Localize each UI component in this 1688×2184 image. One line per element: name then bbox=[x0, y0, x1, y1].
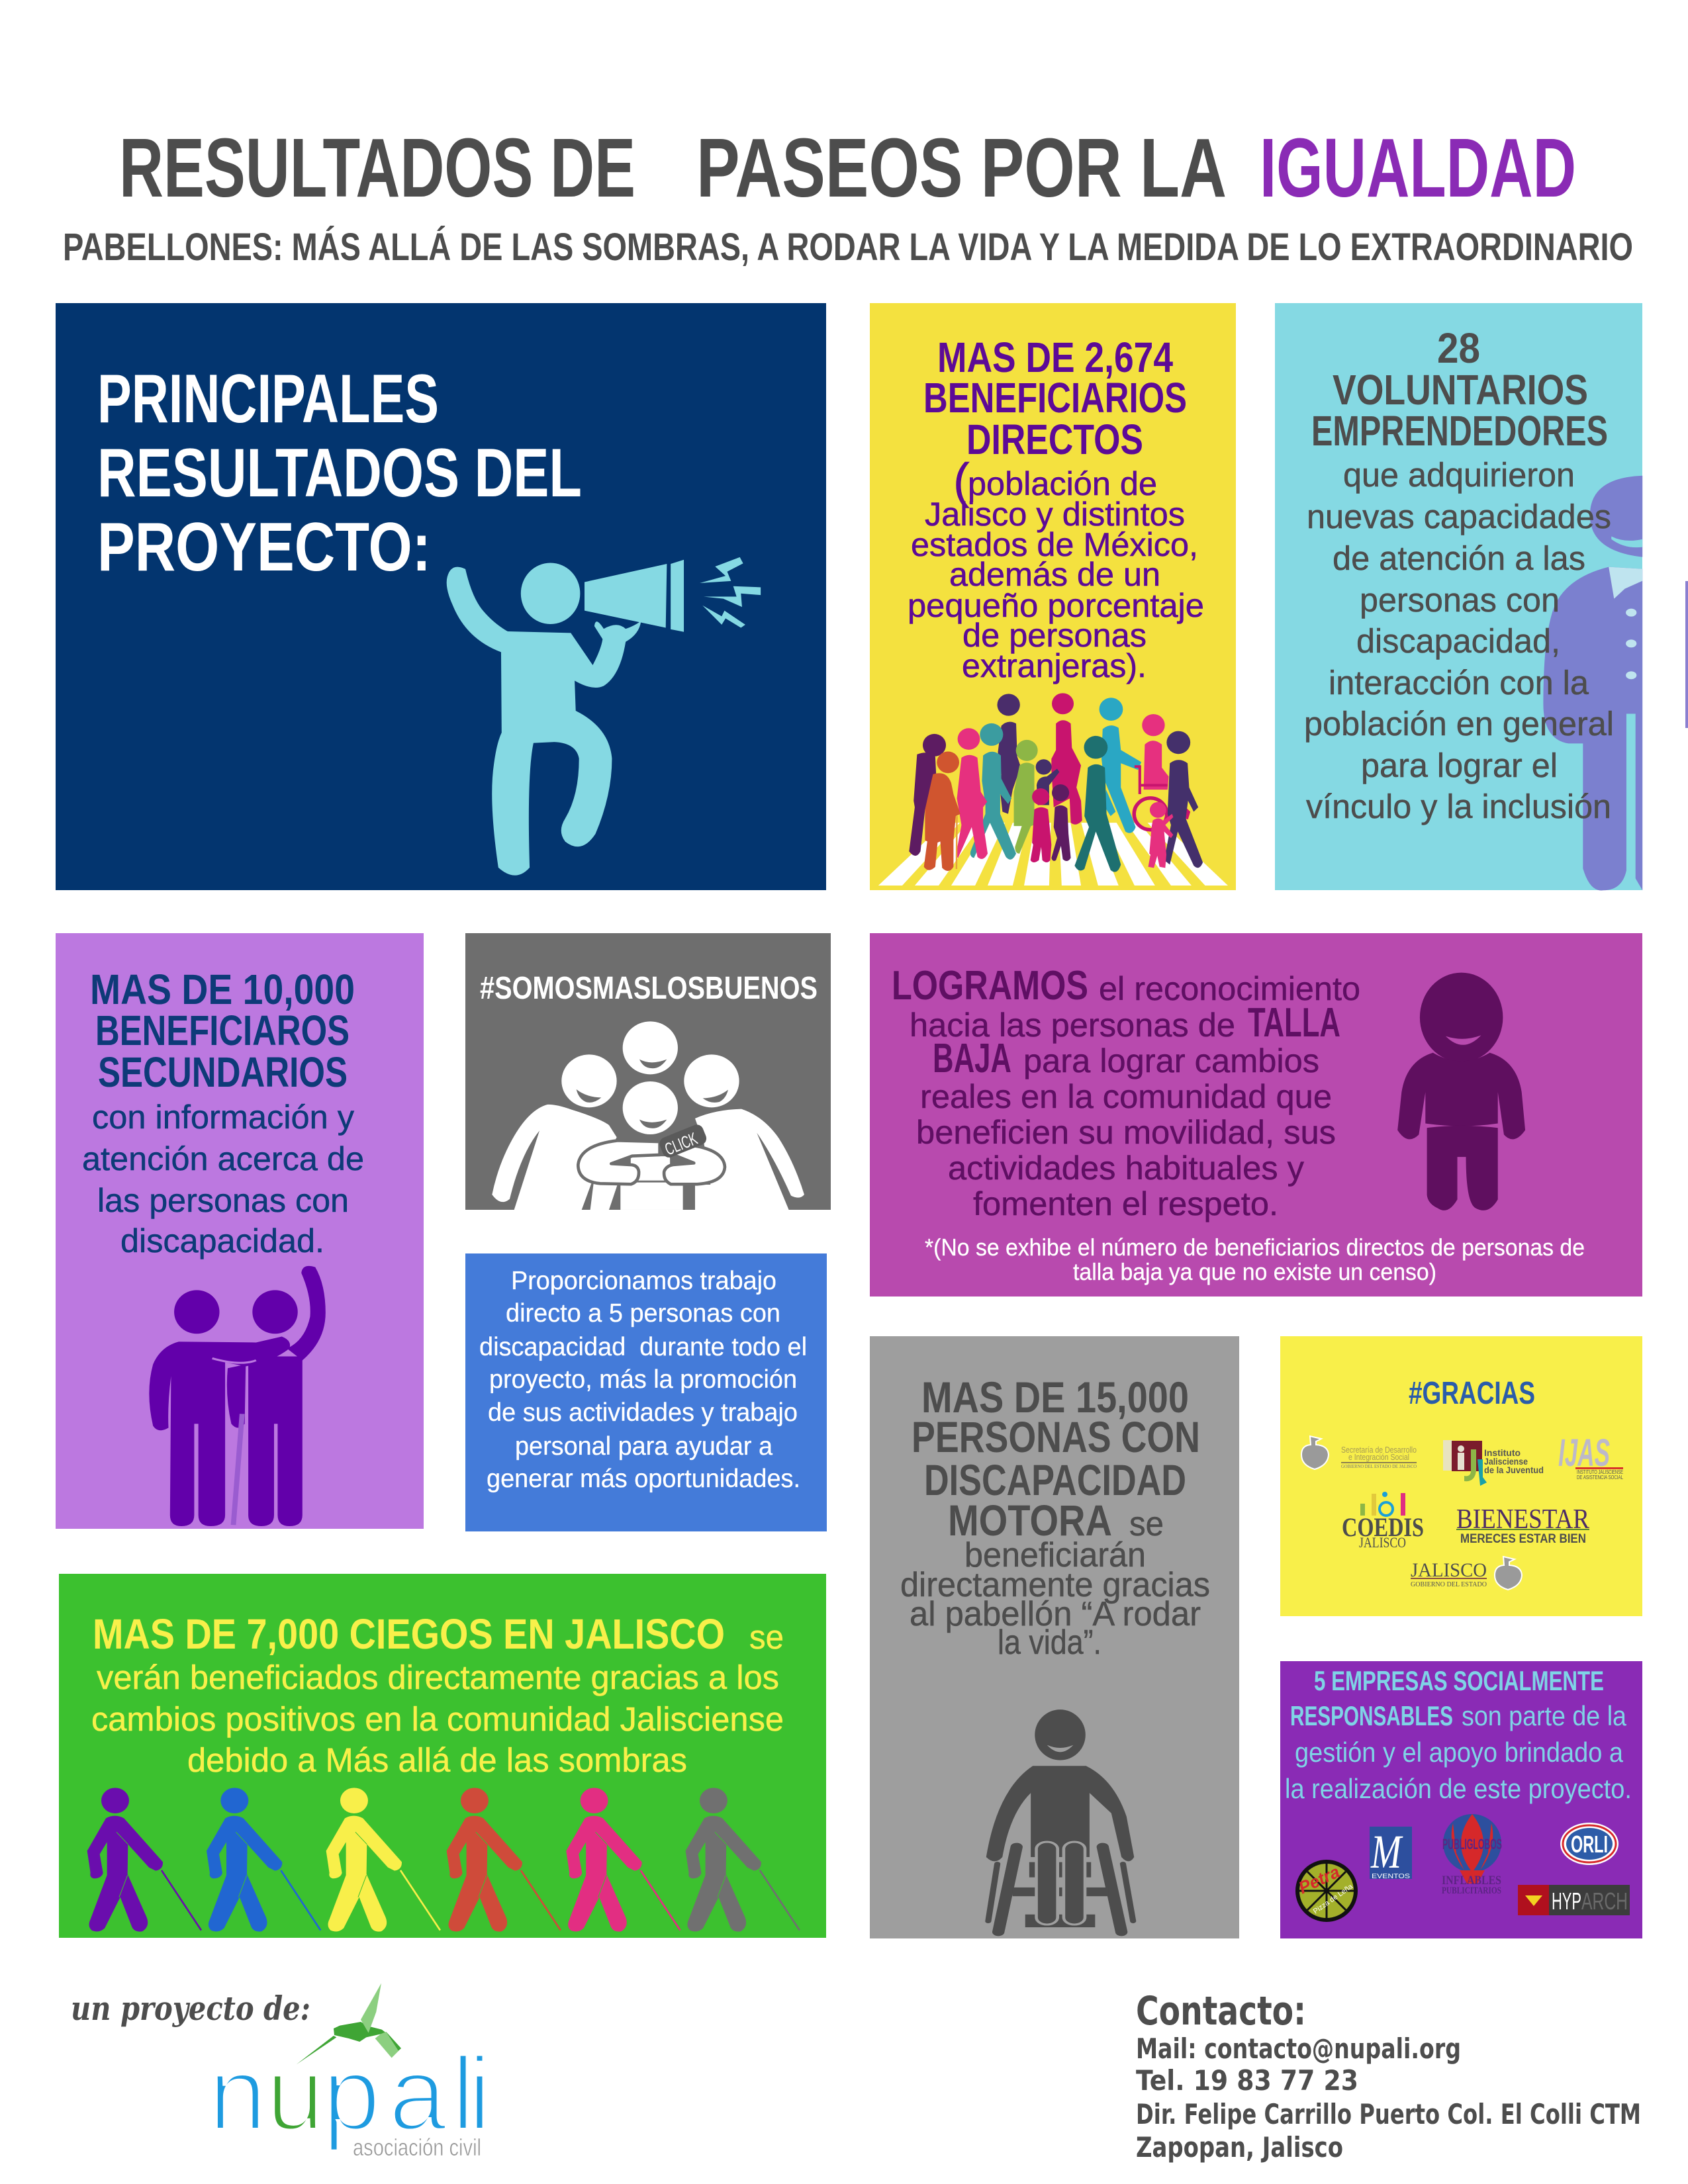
text: empresas description bbox=[1285, 1665, 1632, 1804]
logo: ijas bbox=[1558, 1432, 1623, 1480]
icon: volunteer figure bbox=[1543, 476, 1642, 890]
heading: principales resultados del proyecto: PROYECTO: bbox=[97, 509, 431, 586]
text: trabajo description bbox=[479, 1267, 807, 1493]
logo: petra pizza bbox=[1295, 1860, 1358, 1922]
text: secundarios description: discapacidad. bbox=[120, 1222, 324, 1259]
icon: person with megaphone bbox=[447, 557, 761, 876]
logo: secretaria de desarrollo: GOBIERNO DEL ESTADO DE JALISCO bbox=[1341, 1464, 1417, 1469]
panel: empresas socialmente responsables bbox=[1280, 1661, 1642, 1938]
logo: secretaria de desarrollo: e Integración Social bbox=[1348, 1452, 1409, 1462]
icon: two people with cane bbox=[149, 1266, 326, 1526]
logo: hyparch bbox=[1518, 1885, 1630, 1915]
logo: secretaria de desarrollo: Secretaría de Desarrollo bbox=[1341, 1445, 1417, 1455]
text: logramos reconocimiento: hacia las personas de bbox=[910, 1007, 1235, 1044]
text: logramos reconocimiento: TALLA bbox=[1248, 1000, 1340, 1046]
heading: mas de 2,674 beneficiarios directos: MAS DE 2,674 bbox=[937, 334, 1173, 381]
text: poblacion description: población de bbox=[968, 465, 1157, 502]
text: footnote: talla baja ya que no existe un censo) bbox=[1073, 1258, 1436, 1285]
text: footnote: *(No se exhibe el número de beneficiarios directos de personas de bbox=[925, 1234, 1585, 1261]
heading: 28 voluntarios emprendedores: 28 bbox=[1437, 324, 1480, 372]
logo: instituto jalisciense de la juventud: Jalisciense bbox=[1484, 1456, 1528, 1467]
text: trabajo description: discapacidad durante todo el bbox=[479, 1333, 807, 1361]
text: logramos reconocimiento: BAJA bbox=[933, 1036, 1011, 1081]
text: voluntarios description: nuevas capacidades bbox=[1307, 498, 1611, 535]
title bbox=[119, 121, 1576, 214]
text: empresas description: RESPONSABLES bbox=[1290, 1700, 1453, 1731]
title: PASEOS POR LA bbox=[696, 121, 1227, 214]
heading: hashtag gracias: #GRACIAS bbox=[1409, 1376, 1535, 1411]
wordmark: nupali: n bbox=[209, 2036, 267, 2152]
heading: principales resultados del proyecto bbox=[97, 361, 582, 586]
text: poblacion description: pequeño porcentaje bbox=[908, 587, 1204, 624]
heading: mas de 10,000 beneficiarios secundarios: BENEFICIAROS bbox=[95, 1007, 350, 1054]
contact block bbox=[1136, 1988, 1641, 2163]
logo: instituto jalisciense de la juventud: Instituto bbox=[1484, 1447, 1521, 1458]
text: poblacion description: de personas bbox=[962, 617, 1147, 654]
heading: mas de 15,000 personas: PERSONAS CON bbox=[912, 1412, 1200, 1461]
text: motora description bbox=[900, 1505, 1210, 1662]
text: trabajo description: proyecto, más la promoción bbox=[489, 1365, 797, 1394]
text: voluntarios description: para lograr el bbox=[1361, 747, 1558, 784]
text: motora description: beneficiarán bbox=[964, 1536, 1146, 1574]
logo: petra pizza: Pizza de Leña bbox=[1312, 1882, 1355, 1915]
heading: mas de 15,000 personas: MOTORA bbox=[948, 1496, 1112, 1545]
heading: mas de 15,000 personas: DISCAPACIDAD bbox=[924, 1455, 1186, 1504]
text: logramos reconocimiento: fomenten el respeto. bbox=[973, 1185, 1278, 1222]
text: voluntarios description: de atención a las bbox=[1333, 539, 1585, 577]
text: poblacion description: extranjeras). bbox=[962, 647, 1147, 684]
panel: beneficiarios secundarios bbox=[56, 933, 424, 1529]
logo: bienestar: MERECES ESTAR BIEN bbox=[1460, 1532, 1586, 1546]
logo: jalisco gobierno del estado: JALISCO bbox=[1411, 1559, 1487, 1581]
text: logramos reconocimiento: LOGRAMOS bbox=[892, 963, 1088, 1009]
wordmark: nupali: u bbox=[266, 2036, 324, 2152]
wordmark: nupali: pali bbox=[322, 2036, 491, 2152]
text: voluntarios description: interacción con la bbox=[1329, 664, 1589, 702]
logo: jalisco gobierno del estado bbox=[1411, 1557, 1522, 1590]
logo: publiglobos: INFLABLES bbox=[1442, 1874, 1501, 1888]
logo: bienestar: BIENESTAR bbox=[1456, 1504, 1589, 1535]
heading: mas de 2,674 beneficiarios directos bbox=[923, 334, 1187, 463]
text: logramos reconocimiento bbox=[892, 963, 1360, 1222]
text: motora description: se bbox=[1129, 1505, 1164, 1543]
text: trabajo description: Proporcionamos trabajo bbox=[511, 1267, 776, 1295]
icon: group taking a selfie bbox=[492, 1021, 804, 1210]
text: ciegos description: debido a Más allá de las sombras bbox=[187, 1741, 687, 1779]
logo: ijas: INSTITUTO JALISCIENSE bbox=[1577, 1469, 1623, 1475]
logo: instituto jalisciense de la juventud bbox=[1443, 1440, 1544, 1486]
text: logramos reconocimiento: el reconocimiento bbox=[1099, 970, 1360, 1007]
text: ciegos description bbox=[91, 1618, 784, 1779]
contact block: Zapopan, Jalisco bbox=[1136, 2131, 1343, 2163]
text: poblacion description: ( bbox=[953, 453, 970, 508]
logo: ijas: DE ASISTENCIA SOCIAL bbox=[1577, 1475, 1623, 1480]
text: voluntarios description: discapacidad, bbox=[1356, 622, 1560, 660]
title: IGUALDAD bbox=[1260, 121, 1576, 214]
heading: mas de 15,000 personas bbox=[912, 1373, 1200, 1545]
text: voluntarios description bbox=[1304, 456, 1614, 825]
text: secundarios description: las personas con bbox=[97, 1182, 349, 1219]
text: motora description: directamente gracias bbox=[900, 1566, 1210, 1604]
heading: mas de 10,000 beneficiarios secundarios bbox=[90, 966, 355, 1096]
text: trabajo description: generar más oportunidades. bbox=[487, 1465, 800, 1493]
text: ciegos description: verán beneficiados directamente gracias a los bbox=[97, 1659, 779, 1696]
logo: manuel eventos: EVENTOS bbox=[1372, 1873, 1410, 1880]
contact block: Mail: contacto@nupali.org bbox=[1136, 2032, 1461, 2065]
logo: jalisco gobierno del estado: GOBIERNO DEL ESTADO bbox=[1411, 1581, 1487, 1588]
logo: instituto jalisciense de la juventud: de la Juventud bbox=[1484, 1465, 1544, 1475]
text: trabajo description: personal para ayudar a bbox=[515, 1432, 773, 1461]
text: footnote bbox=[925, 1234, 1585, 1285]
text: poblacion description: además de un bbox=[949, 556, 1160, 593]
label: click tag: CLICK bbox=[662, 1128, 700, 1160]
logo: bienestar bbox=[1456, 1504, 1589, 1546]
text: voluntarios description: vínculo y la inclusión bbox=[1306, 788, 1611, 825]
text: secundarios description bbox=[82, 1099, 364, 1259]
panel: proporcionamos trabajo bbox=[465, 1253, 827, 1531]
logo: coedis jalisco: JALISCO bbox=[1359, 1534, 1406, 1551]
text: secundarios description: atención acerca de bbox=[82, 1140, 364, 1177]
logo: publiglobos bbox=[1442, 1814, 1502, 1896]
text: poblacion description: estados de México, bbox=[911, 526, 1198, 563]
text: empresas description: son parte de la bbox=[1462, 1700, 1627, 1731]
logo: petra pizza: Petra bbox=[1295, 1862, 1342, 1897]
contact block: Contacto: bbox=[1136, 1988, 1306, 2034]
text: empresas description: gestión y el apoyo brindado a bbox=[1295, 1737, 1624, 1768]
panel: beneficiarios directos bbox=[870, 303, 1236, 890]
text: ciegos description: se bbox=[749, 1618, 784, 1656]
logo: publiglobos: PUBLICITARIOS bbox=[1442, 1886, 1501, 1896]
text: voluntarios description: población en general bbox=[1304, 705, 1614, 743]
logo: orli: ORLI bbox=[1571, 1831, 1608, 1858]
text: poblacion description: Jalisco y distintos bbox=[925, 496, 1185, 533]
text: trabajo description: directo a 5 personas con bbox=[506, 1299, 780, 1328]
logo: ijas: IJAS bbox=[1558, 1432, 1610, 1475]
logo: orli bbox=[1560, 1823, 1618, 1865]
panel: somos mas los buenos bbox=[465, 933, 831, 1210]
text: logramos reconocimiento: beneficien su movilidad, sus bbox=[916, 1114, 1336, 1151]
text: un proyecto de: un proyecto de: bbox=[71, 1989, 310, 2028]
panel: talla baja bbox=[870, 933, 1642, 1297]
text: logramos reconocimiento: para lograr cambios bbox=[1023, 1042, 1319, 1079]
icon: crowd on crosswalk bbox=[878, 693, 1228, 886]
logo: manuel eventos: M bbox=[1370, 1825, 1403, 1878]
heading: mas de 10,000 beneficiarios secundarios: SECUNDARIOS bbox=[98, 1048, 348, 1096]
logo: coedis jalisco: COEDIS bbox=[1342, 1512, 1424, 1542]
title: RESULTADOS DE bbox=[119, 121, 635, 214]
heading: 28 voluntarios emprendedores: VOLUNTARIOS bbox=[1333, 366, 1588, 414]
panel: principales resultados bbox=[56, 303, 826, 890]
icon: short stature person bbox=[1397, 973, 1525, 1210]
icon: six walkers with canes bbox=[87, 1788, 800, 1932]
logo: hyparch: HYP bbox=[1552, 1888, 1581, 1915]
heading: mas de 15,000 personas: MAS DE 15,000 bbox=[921, 1373, 1189, 1422]
icon: hummingbird bbox=[297, 1983, 401, 2064]
panel: ciegos en jalisco bbox=[59, 1574, 826, 1938]
logo: coedis jalisco bbox=[1342, 1492, 1424, 1551]
text: voluntarios description: que adquirieron bbox=[1343, 456, 1575, 494]
heading: 28 voluntarios emprendedores bbox=[1311, 324, 1608, 455]
heading: hashtag somos mas los buenos: #SOMOSMASLOSBUENOS bbox=[480, 971, 818, 1006]
panel: voluntarios emprendedores bbox=[1275, 303, 1642, 890]
heading: principales resultados del proyecto: RESULTADOS DEL bbox=[97, 435, 582, 512]
text: logramos reconocimiento: reales en la comunidad que bbox=[920, 1078, 1332, 1115]
text: secundarios description: con información y bbox=[92, 1099, 354, 1136]
logo: publiglobos: PUBLIGLOBOS bbox=[1442, 1836, 1502, 1852]
heading: mas de 2,674 beneficiarios directos: BENEFICIARIOS bbox=[923, 374, 1187, 422]
panel: gracias logos bbox=[1280, 1336, 1642, 1616]
logo: secretaria de desarrollo bbox=[1301, 1436, 1417, 1469]
panel: discapacidad motora bbox=[870, 1336, 1239, 1938]
heading: mas de 2,674 beneficiarios directos: DIRECTOS bbox=[966, 416, 1143, 463]
text: asociacion civil: asociación civil bbox=[353, 2134, 481, 2161]
heading: mas de 10,000 beneficiarios secundarios: MAS DE 10,000 bbox=[90, 966, 355, 1013]
contact block: Tel. 19 83 77 23 bbox=[1136, 2064, 1358, 2097]
icon: person in wheelchair bbox=[986, 1709, 1134, 1932]
text: motora description: al pabellón “A rodar bbox=[910, 1595, 1201, 1633]
text: poblacion description bbox=[908, 453, 1204, 684]
text: logramos reconocimiento: actividades habituales y bbox=[948, 1150, 1304, 1187]
text: motora description: la vida”. bbox=[998, 1623, 1102, 1662]
heading: mas de 7,000 ciegos: MAS DE 7,000 CIEGOS EN JALISCO bbox=[93, 1610, 725, 1658]
text: voluntarios description: personas con bbox=[1360, 581, 1560, 619]
text: trabajo description: de sus actividades y trabajo bbox=[488, 1398, 798, 1427]
text: empresas description: la realización de este proyecto. bbox=[1285, 1773, 1632, 1804]
logo: hyparch: ARCH bbox=[1581, 1888, 1628, 1915]
logo: nupali bbox=[209, 1983, 491, 2161]
text: ciegos description: cambios positivos en la comunidad Jalisciense bbox=[91, 1700, 784, 1738]
heading: principales resultados del proyecto: PRINCIPALES bbox=[97, 361, 439, 437]
